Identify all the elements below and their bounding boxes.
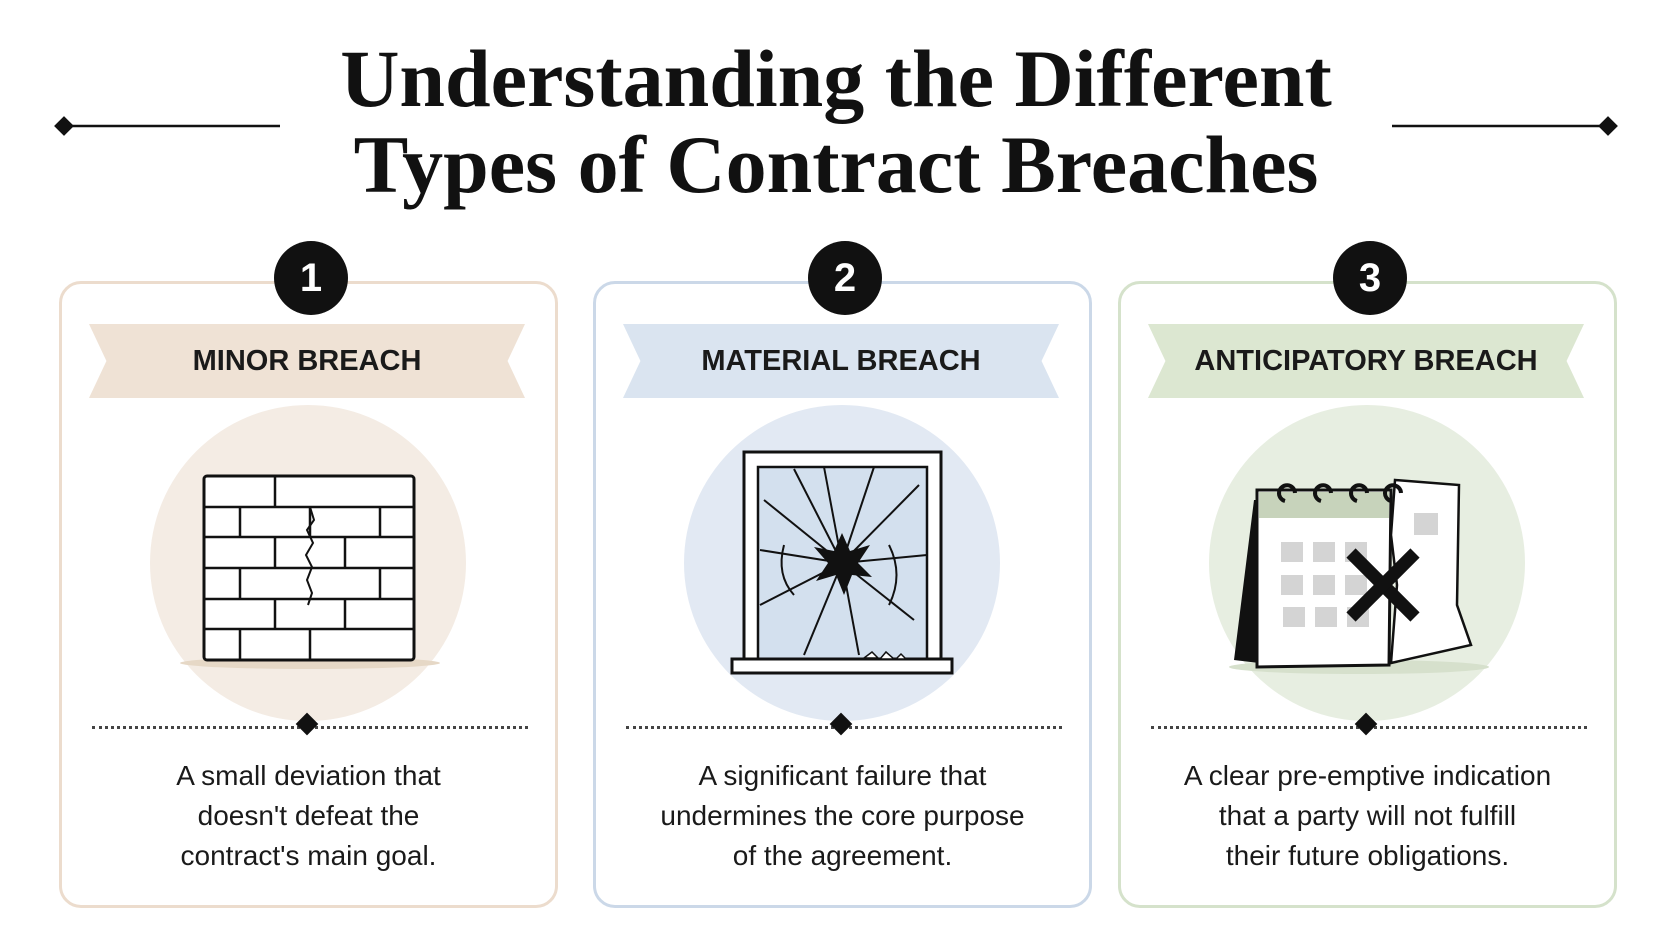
text: anticipatory breach description: A clear pre-emptive indication [1184, 760, 1551, 791]
text: minor breach description: doesn't defeat the [198, 800, 419, 831]
text: minor breach description [176, 760, 441, 871]
icon: torn calendar with X [1209, 405, 1525, 721]
decorative line left [54, 116, 280, 136]
number badge 2: 2 [834, 256, 856, 300]
icon: shattered window [684, 405, 1000, 721]
title [340, 33, 1332, 210]
decorative line right [1392, 116, 1618, 136]
banner: minor breach: MINOR BREACH [193, 345, 421, 377]
text: minor breach description: contract's main goal. [181, 840, 436, 871]
banner: minor breach [89, 324, 525, 398]
panel: anticipatory breach [1118, 281, 1617, 908]
text: material breach description: undermines the core purpose [660, 800, 1025, 831]
number badge 1: 1 [300, 256, 322, 300]
text: minor breach description: A small deviation that [176, 760, 441, 791]
banner: material breach: MATERIAL BREACH [701, 345, 981, 377]
number badge 3 [1333, 241, 1407, 315]
panel: material breach [593, 281, 1092, 908]
panel: minor breach [59, 281, 558, 908]
title: Understanding the Different [340, 33, 1332, 124]
banner: anticipatory breach [1148, 324, 1584, 398]
text: anticipatory breach description: their future obligations. [1226, 840, 1509, 871]
number badge 1 [274, 241, 348, 315]
number badge 3: 3 [1359, 256, 1381, 300]
banner: material breach [623, 324, 1059, 398]
text: anticipatory breach description: that a party will not fulfill [1219, 800, 1516, 831]
icon: cracked brick wall [150, 405, 466, 721]
text: material breach description: A significant failure that [699, 760, 986, 791]
text: material breach description [660, 760, 1025, 871]
number badge 2 [808, 241, 882, 315]
title: Types of Contract Breaches [354, 119, 1318, 210]
text: material breach description: of the agreement. [733, 840, 952, 871]
banner: anticipatory breach: ANTICIPATORY BREACH [1194, 345, 1538, 377]
text: anticipatory breach description [1184, 760, 1551, 871]
